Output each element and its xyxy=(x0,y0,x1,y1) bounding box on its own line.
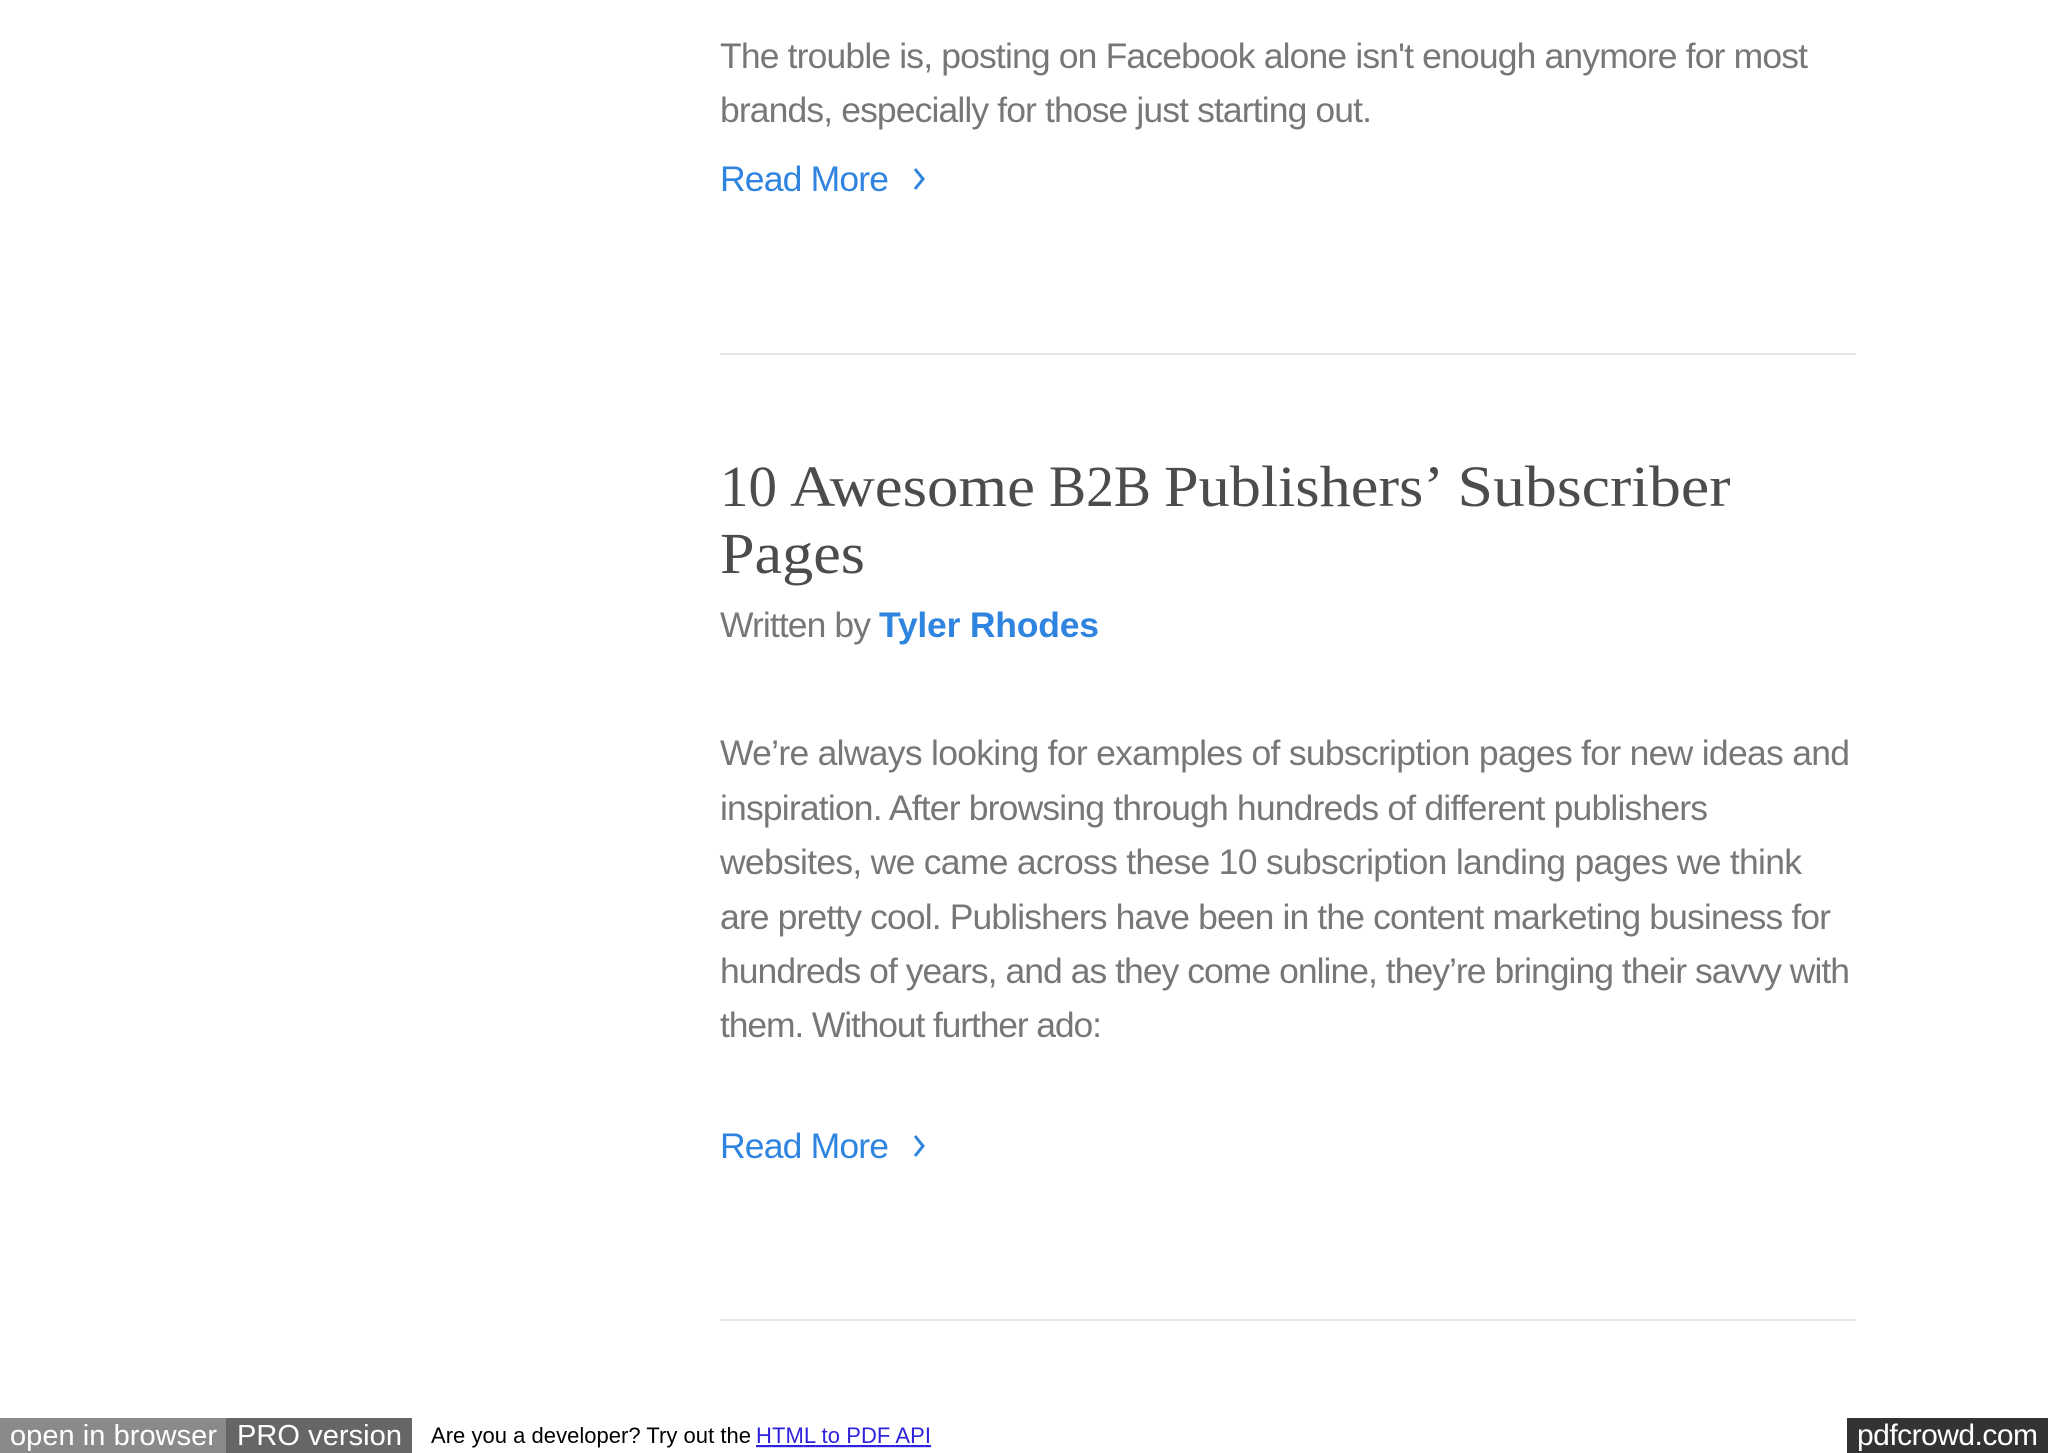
footer text: developer promo: HTML to PDF API xyxy=(756,1423,931,1448)
link: read more, second article: Read More xyxy=(720,1126,889,1166)
footer button: open in browser: open in browser xyxy=(10,1420,217,1452)
footer text: developer promo xyxy=(431,1423,931,1448)
text block: article excerpt: them. Without further ado: xyxy=(720,1005,1102,1045)
heading: article title: B2B xyxy=(1049,454,1151,519)
heading: article title: 10 xyxy=(720,454,777,519)
heading: article title: Awesome xyxy=(790,454,1035,519)
text block: article excerpt xyxy=(719,733,1850,1045)
byline: Written by xyxy=(720,605,871,645)
heading: article title: Publishers’ xyxy=(1164,454,1444,519)
text block: intro paragraph ending: brands, especially for those just starting out. xyxy=(720,90,1372,130)
text block: article excerpt: We’re always looking for examples of subscription pages for new ideas and xyxy=(720,733,1850,773)
text block: article excerpt: are pretty cool. Publishers have been in the content marketing business for xyxy=(720,897,1831,937)
heading: article title xyxy=(720,454,1730,586)
footer button: PRO version: PRO version xyxy=(237,1420,402,1452)
heading: article title: Subscriber xyxy=(1458,454,1730,519)
byline: Tyler Rhodes xyxy=(879,605,1099,645)
text block: article excerpt: inspiration. After browsing through hundreds of different publishers xyxy=(720,788,1708,828)
heading: article title: Pages xyxy=(720,521,865,586)
footer text: developer promo: Are you a developer? Try out the xyxy=(431,1423,751,1448)
text block: intro paragraph ending: The trouble is, posting on Facebook alone isn't enough anymore for most xyxy=(720,36,1808,76)
link: read more, first article: Read More xyxy=(720,159,889,199)
text block: article excerpt: hundreds of years, and as they come online, they’re bringing their savvy with xyxy=(720,951,1850,991)
text block: article excerpt: websites, we came across these 10 subscription landing pages we think xyxy=(719,842,1802,882)
text block: intro paragraph ending xyxy=(720,36,1808,130)
byline xyxy=(720,605,1099,645)
footer badge: pdfcrowd.com: pdfcrowd.com xyxy=(1857,1419,2038,1452)
